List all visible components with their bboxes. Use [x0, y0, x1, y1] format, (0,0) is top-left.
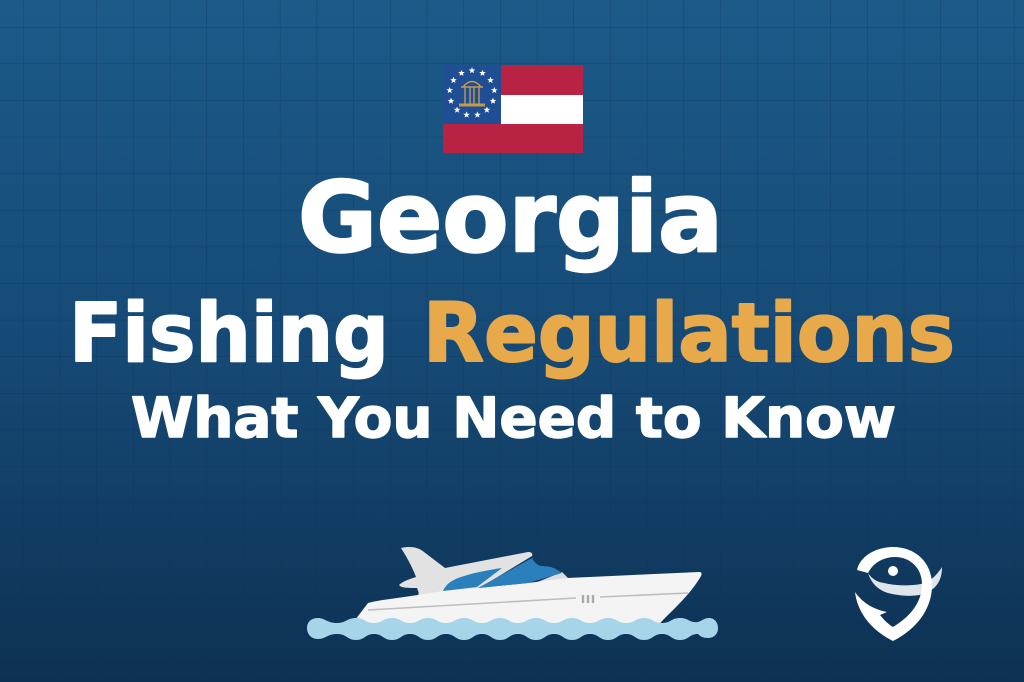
boat windows — [443, 568, 502, 591]
hull vents — [583, 595, 593, 603]
boat fin — [399, 547, 445, 596]
subtitle: What You Need to Know — [131, 386, 896, 450]
icon: fish hook logo — [855, 547, 942, 641]
title word: Regulations: Regulations — [423, 287, 955, 381]
icon: Georgia flag — [443, 65, 583, 153]
logo fish band — [868, 567, 942, 596]
boat hull — [350, 572, 702, 628]
hull stripe — [368, 593, 688, 610]
illustration: boat on water — [307, 547, 718, 640]
title: Georgia: Georgia — [298, 161, 723, 274]
water — [307, 618, 718, 640]
title word: Fishing: Fishing — [69, 287, 389, 381]
title: Fishing Regulations — [69, 287, 955, 381]
logo outline — [855, 547, 932, 641]
logo eye — [888, 566, 898, 576]
boat deck — [535, 572, 568, 583]
boat cabin roof — [418, 552, 532, 596]
